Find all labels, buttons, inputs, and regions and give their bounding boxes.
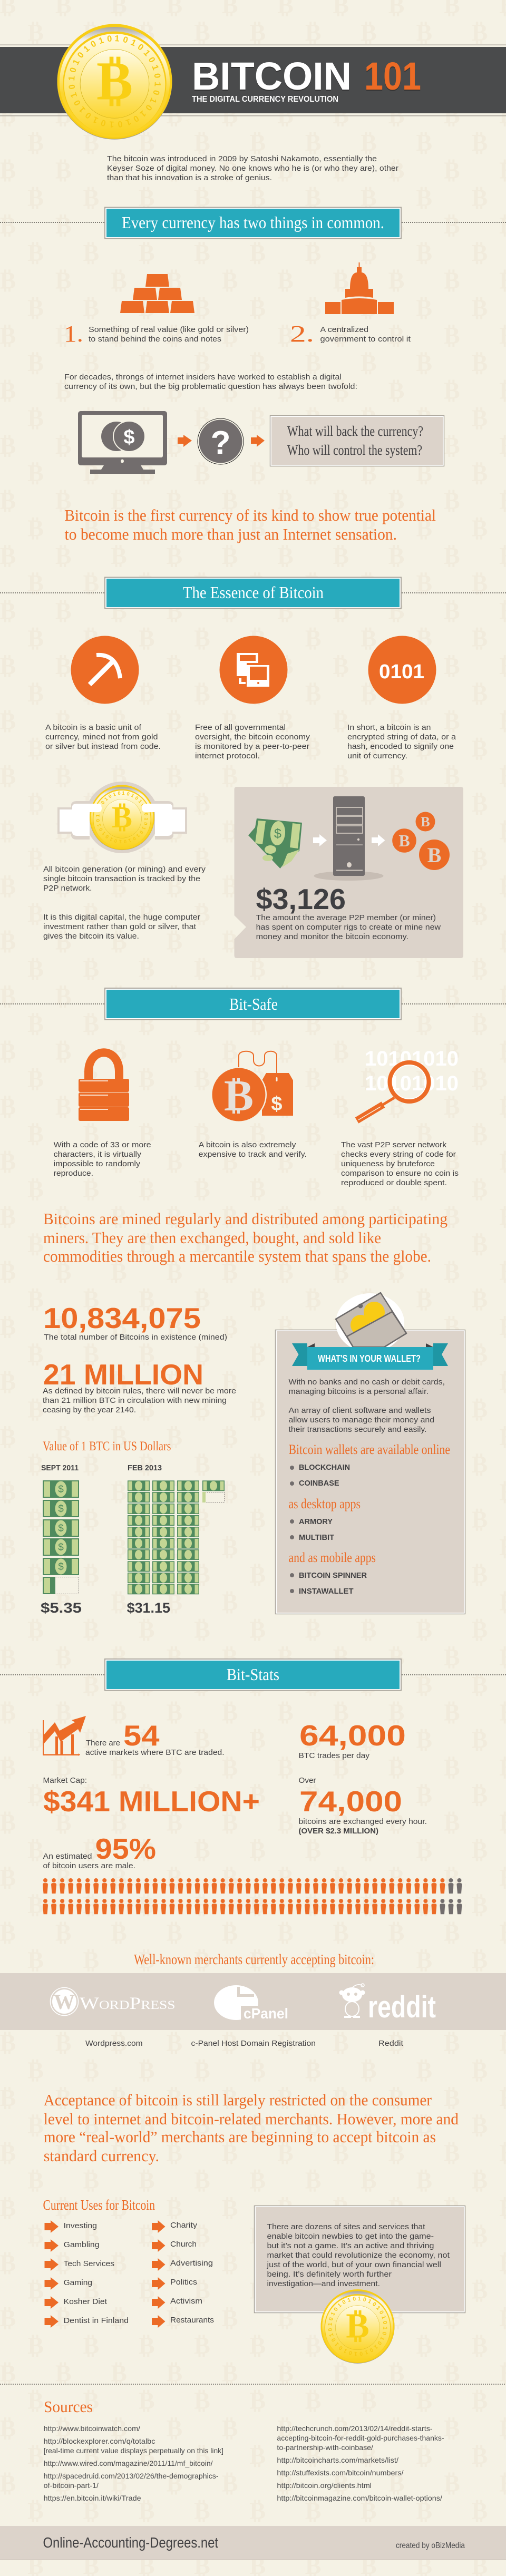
icon: coin with price tag: $ — [271, 1093, 283, 1115]
text: code of 33: impossible to randomly — [54, 1159, 141, 1168]
source list left: http://spacedruid.com/2013/02/26/the-demographics- — [44, 2472, 219, 2480]
ribbon — [292, 1343, 448, 1370]
stat: 64,000: BTC trades per day — [298, 1751, 370, 1760]
wallet list: INSTAWALLET — [299, 1587, 353, 1596]
list: uses column 1: Investing — [64, 2221, 97, 2230]
chart: Sept 2011 bills: $ — [58, 1504, 64, 1515]
header band — [0, 44, 506, 116]
icon: 0101 circle — [368, 636, 436, 704]
stat: 21 million: ceasing by the year 2140. — [43, 1406, 136, 1414]
text: server network: reproduced or double spent. — [341, 1178, 447, 1187]
statement: acceptance: level to internet and bitcoin-related merchants. However, more and — [44, 2110, 459, 2128]
text: track and verify — [199, 1140, 307, 1159]
panel: closing note: investigation—and investment. — [267, 2279, 380, 2288]
numbered point 1: to stand behind the coins and notes — [89, 335, 221, 344]
panel: what's in your wallet — [275, 1293, 465, 1614]
icon: large bitcoin coin — [57, 24, 172, 140]
icon: orange coins: B — [427, 843, 441, 867]
source list left: https://en.bitcoin.it/wiki/Trade — [44, 2494, 141, 2502]
list: uses column 1 — [44, 2220, 129, 2328]
stat: 64,000: 64,000 — [299, 1719, 406, 1752]
logo: WordPress — [51, 1988, 175, 2015]
icon: large bitcoin coin: B — [96, 51, 133, 111]
text: P2P tracking: All bitcoin generation (or mining) and every — [43, 865, 206, 874]
icon: coin with price tag — [212, 1051, 293, 1122]
stat: 74,000 — [298, 1776, 427, 1836]
wallet list: as desktop apps — [289, 1496, 361, 1511]
panel: closing note: but it’s not a game. It’s an active and thriving — [267, 2241, 434, 2250]
text: P2P tracking: P2P network. — [43, 884, 92, 893]
icon: capitol building — [325, 262, 394, 314]
stat: 64,000 — [298, 1719, 406, 1760]
intro text: than that his innovation is a stroke of genius. — [107, 173, 272, 182]
wallet list: and as mobile apps — [289, 1550, 376, 1565]
numbered point 2: A centralized — [320, 325, 368, 334]
arrow — [251, 435, 265, 447]
text: server network: comparison to ensure no coin is — [341, 1169, 459, 1178]
stat: 21 million: As defined by bitcoin rules, there will never be more — [43, 1387, 236, 1396]
text: server network: checks every string of code for — [341, 1150, 456, 1159]
icon: small bitcoin coin: 10101010101010101010101010101010 — [328, 2297, 387, 2356]
icon: hands holding coin: 10101010101010101010101010101010 — [96, 792, 148, 843]
icon: devices circle — [219, 636, 288, 704]
chart: Sept 2011 bills: SEPT 2011 — [41, 1463, 79, 1472]
text: code of 33 — [54, 1140, 151, 1178]
footer band: Online-Accounting-Degrees.net — [43, 2534, 218, 2551]
icon: server — [314, 796, 384, 881]
source list left: [real-time current value displays perpetually on this link] — [44, 2446, 223, 2455]
heading: sources: Sources — [44, 2397, 93, 2416]
stat: 54 markets — [85, 1719, 225, 1757]
source list right: accepting-bitcoin-for-reddit-gold-purchases-thanks- — [277, 2434, 444, 2442]
icon: wallet — [336, 1293, 406, 1352]
icon: rising chart — [43, 1716, 86, 1756]
source list right — [277, 2424, 444, 2502]
text: server network: The vast P2P server network — [341, 1140, 447, 1149]
text: encrypted string: In short, a bitcoin is an — [347, 723, 431, 732]
text: code of 33: characters, it is virtually — [54, 1150, 142, 1159]
chart: Sept 2011 bills: $5.35 — [41, 1600, 82, 1616]
list: uses column 2: Advertising — [170, 2259, 213, 2268]
icon: small bitcoin coin: B — [346, 2307, 369, 2346]
wallet list — [289, 1442, 450, 1596]
intro text: Keyser Soze of digital money. No one knows who he is (or who they are), other — [107, 164, 398, 173]
text: code of 33: reproduce. — [54, 1169, 93, 1178]
merchant labels: c-Panel Host Domain Registration — [191, 2040, 316, 2048]
chart: Sept 2011 bills: $ — [58, 1542, 64, 1553]
icon: hands holding coin — [57, 782, 187, 853]
chart: Feb 2013 bills — [127, 1463, 225, 1616]
list: uses column 1: Gaming — [64, 2278, 92, 2287]
stat: 21 million: than 21 million BTC in circulation with new mining — [43, 1396, 227, 1405]
logo: WordPress: W — [54, 1990, 75, 2014]
source list right: http://techcrunch.com/2013/02/14/reddit-starts- — [277, 2424, 433, 2433]
arrow — [178, 435, 192, 447]
source list left: of-bitcoin-part-1/ — [44, 2481, 99, 2490]
text: server network: uniqueness by bruteforce — [341, 1159, 435, 1168]
text: P2P tracking: investment rather than gold or silver, that — [43, 922, 197, 931]
icon: question mark: ? — [211, 425, 230, 461]
statement: mined regularly: miners. They are then exchanged, bought, and sold like — [43, 1228, 381, 1247]
text: code of 33: With a code of 33 or more — [54, 1140, 151, 1149]
pictogram: people rows — [43, 1878, 465, 1915]
wallet list: Bitcoin wallets are available online — [289, 1442, 450, 1457]
title — [192, 54, 421, 98]
stat: 21 million — [43, 1358, 236, 1414]
icon: magnifying glass over binary: 10101010 — [365, 1047, 459, 1070]
title: 101 — [364, 54, 421, 98]
stat: total bitcoins: 10,834,075 — [43, 1302, 201, 1334]
text: basic unit: A bitcoin is a basic unit of — [45, 723, 142, 732]
source list right: to-partnership-with-coinbase/ — [277, 2443, 373, 2452]
numbered point 1 — [64, 321, 249, 347]
merchant labels: Reddit — [378, 2040, 403, 2048]
list: uses column 2 — [152, 2220, 214, 2328]
source list left: http://www.bitcoinwatch.com/ — [44, 2424, 140, 2433]
heading: merchants: Well-known merchants currently accepting bitcoin: — [134, 1951, 374, 1967]
intro text: The bitcoin was introduced in 2009 by Satoshi Nakamoto, essentially the — [107, 154, 377, 163]
section banner: every currency — [0, 208, 506, 238]
icon: orange coins: B — [421, 814, 430, 830]
stat description: has spent on computer rigs to create or mine new — [256, 923, 441, 932]
stat: 54 markets: There are — [86, 1739, 120, 1748]
panel: closing note — [254, 2206, 465, 2312]
stat: market cap: Market Cap: — [43, 1776, 87, 1785]
wallet list: ARMORY — [299, 1517, 333, 1526]
icon: monitor with coins — [78, 411, 167, 474]
stat description — [256, 913, 441, 941]
stat: 74,000: 74,000 — [299, 1785, 402, 1818]
statement: mined regularly — [43, 1209, 447, 1265]
logo: cPanel: cPanel — [244, 2005, 288, 2022]
stat: 95% male: of bitcoin users are male. — [43, 1861, 135, 1870]
text: basic unit — [45, 723, 161, 751]
section banner: bit-stats: Bit-Stats — [227, 1665, 279, 1684]
paragraph: for decades: For decades, throngs of internet insiders have worked to establish a digital — [64, 373, 342, 382]
statement: first currency: Bitcoin is the first currency of its kind to show true potential — [64, 506, 436, 524]
wallet list: BITCOIN SPINNER — [299, 1571, 367, 1580]
numbered point 2: government to control it — [320, 335, 411, 344]
arrow — [313, 834, 327, 846]
stat: market cap: $341 MILLION+ — [43, 1785, 260, 1818]
text: encrypted string — [347, 723, 456, 760]
stat: 74,000: bitcoins are exchanged every hour. — [298, 1817, 427, 1826]
section banner: bit-safe — [0, 988, 506, 1020]
text: encrypted string: hash, encoded to signify one — [347, 742, 454, 751]
list: uses column 1: Tech Services — [64, 2259, 114, 2268]
subtitle: THE DIGITAL CURRENCY REVOLUTION — [192, 95, 338, 104]
text: free of oversight: is monitored by a peer-to-peer — [195, 742, 309, 751]
panel text: With no banks and no cash or debit cards, — [289, 1378, 445, 1387]
merchants band — [0, 1973, 506, 2030]
text: P2P tracking — [43, 865, 206, 941]
chart: Sept 2011 bills: $ — [58, 1523, 64, 1534]
icon: money stack: $ — [274, 826, 281, 841]
icon: hands holding coin: B — [112, 800, 132, 834]
intro text — [107, 154, 398, 182]
stat: 54 markets: 54 — [123, 1719, 160, 1752]
question box — [270, 415, 444, 466]
footer band: created by oBizMedia — [396, 2541, 465, 2550]
stat description: money and monitor the bitcoin economy. — [256, 932, 408, 941]
icon: small bitcoin coin — [320, 2289, 394, 2364]
panel text: their transactions securely and easily. — [289, 1425, 427, 1434]
panel: closing note: There are dozens of sites and services that — [267, 2222, 425, 2231]
section banner: bit-safe: Bit-Safe — [229, 994, 278, 1013]
stat: 74,000: Over — [298, 1776, 316, 1785]
icon: pickaxe circle — [71, 636, 139, 704]
icon: orange coins: B — [398, 831, 410, 850]
icon: magnifying glass over binary: 10101010 — [365, 1072, 459, 1095]
numbered point 2 — [290, 321, 411, 347]
chart: Sept 2011 bills — [41, 1463, 82, 1616]
source list left: http://www.wired.com/magazine/2011/11/mf_bitcoin/ — [44, 2459, 213, 2467]
stat: total bitcoins — [43, 1302, 227, 1342]
section banner: essence: The Essence of Bitcoin — [183, 583, 324, 602]
statement: acceptance — [44, 2091, 459, 2165]
numbered point 1: Something of real value (like gold or silver) — [89, 325, 249, 334]
chart: Sept 2011 bills: $ — [58, 1484, 64, 1495]
statement: acceptance: more “real-world” merchants are beginning to accept bitcoin as — [44, 2128, 436, 2146]
question box: What will back the currency? — [287, 423, 423, 439]
statement: acceptance: standard currency. — [44, 2146, 159, 2165]
icon: coin with price tag: B — [224, 1071, 254, 1120]
icon: orange coins — [392, 812, 450, 870]
chart: Feb 2013 bills: FEB 2013 — [128, 1463, 162, 1472]
section banner: essence — [0, 578, 506, 608]
text: free of oversight: Free of all governmental — [195, 723, 286, 732]
question box: Who will control the system? — [287, 442, 422, 458]
source list left — [44, 2424, 223, 2502]
icon: padlock — [79, 1052, 129, 1121]
text: P2P tracking: single bitcoin transaction is tracked by the — [43, 874, 200, 883]
icon: 0101 circle: 0101 — [379, 661, 424, 683]
statement: first currency: to become much more than just an Internet sensation. — [64, 525, 397, 543]
list: uses column 1: Dentist in Finland — [64, 2316, 129, 2325]
icon: money stack — [248, 818, 302, 869]
icon: monitor with coins: $ — [123, 426, 135, 448]
panel: closing note: market that could revolutionize the economy, not — [267, 2251, 450, 2260]
logo: reddit: reddit — [368, 1990, 436, 2024]
logo: WordPress: WordPress — [80, 1994, 175, 2013]
text: free of oversight: internet protocol. — [195, 752, 260, 760]
logo: reddit — [339, 1984, 436, 2024]
text: free of oversight: oversight, the bitcoin economy — [195, 733, 310, 741]
text: P2P tracking: It is this digital capital, the huge computer — [43, 913, 200, 922]
wallet list: BLOCKCHAIN — [299, 1463, 350, 1472]
list: uses column 1: Kosher Diet — [64, 2297, 108, 2306]
wallet list: MULTIBIT — [299, 1533, 334, 1542]
panel: closing note: just of the world, but of your own financial well — [266, 2260, 441, 2269]
numbered point 2: 2. — [290, 321, 314, 347]
panel: closing note: enable bitcoin newbies to get into the game- — [267, 2232, 434, 2241]
statement: mined regularly: commodities through a mercantile system that spans the globe. — [43, 1247, 431, 1265]
icon: gold bars — [120, 274, 194, 313]
panel text: managing bitcoins is a personal affair. — [289, 1387, 429, 1396]
text: track and verify: expensive to track and verify. — [199, 1150, 307, 1159]
list: uses column 2: Charity — [170, 2221, 198, 2230]
statement: first currency — [64, 506, 436, 543]
text: basic unit: currency, mined not from gold — [45, 733, 158, 741]
numbered point 1: 1. — [64, 321, 83, 347]
logo: cPanel — [214, 1985, 288, 2022]
source list left: http://blockexplorer.com/q/totalbc — [44, 2437, 155, 2445]
stat: 74,000: (OVER $2.3 MILLION) — [298, 1827, 378, 1836]
text: encrypted string: unit of currency. — [347, 752, 407, 760]
icon: large bitcoin coin: 10101010101010101010101010101010 — [69, 35, 161, 128]
panel: mining cost — [234, 787, 463, 958]
paragraph: for decades: currency of its own, but the big problematic question has always been twofold: — [64, 382, 357, 391]
merchant labels: Wordpress.com — [85, 2040, 143, 2048]
list: uses column 1: Gambling — [64, 2240, 100, 2249]
stat: total bitcoins: The total number of Bitcoins in existence (mined) — [44, 1333, 227, 1342]
chart: Feb 2013 bills: $31.15 — [127, 1600, 170, 1616]
list: uses column 2: Activism — [170, 2297, 202, 2306]
merchant labels — [85, 2040, 403, 2048]
text: server network — [341, 1140, 459, 1187]
stat: 54 markets: active markets where BTC are traded. — [85, 1748, 225, 1757]
panel text: An array of client software and wallets — [289, 1406, 431, 1415]
text: encrypted string: encrypted string of data, or a — [347, 733, 456, 741]
text: basic unit: or silver but instead from code. — [45, 742, 161, 751]
stat: 95% male: An estimated — [43, 1852, 92, 1861]
panel text — [289, 1378, 445, 1434]
stat: 95% male: 95% — [95, 1832, 156, 1865]
stat: 95% male — [43, 1832, 156, 1870]
statement: mined regularly: Bitcoins are mined regularly and distributed among participating — [43, 1209, 447, 1228]
paragraph: for decades — [64, 373, 357, 391]
source list right: http://bitcoinmagazine.com/bitcoin-wallet-options/ — [277, 2494, 442, 2502]
chart heading: value of 1 BTC: Value of 1 BTC in US Dollars — [43, 1439, 171, 1453]
list: uses column 2: Restaurants — [170, 2316, 214, 2325]
section banner: every currency: Every currency has two things in common. — [122, 213, 384, 232]
panel text: allow users to manage their money and — [289, 1416, 434, 1424]
chart: Sept 2011 bills: $ — [58, 1562, 64, 1573]
heading: current uses: Current Uses for Bitcoin — [43, 2197, 155, 2213]
text: free of oversight — [195, 723, 310, 760]
statement: acceptance: Acceptance of bitcoin is still largely restricted on the consumer — [44, 2091, 432, 2109]
source list right: http://bitcoincharts.com/markets/list/ — [277, 2456, 398, 2464]
text: P2P tracking: gives the bitcoin its value. — [43, 932, 139, 941]
icon: magnifying glass over binary — [357, 1047, 459, 1120]
list: uses column 2: Church — [170, 2240, 197, 2249]
footer band — [0, 2526, 506, 2560]
source list right: http://stuffexists.com/bitcoin/numbers/ — [277, 2468, 404, 2477]
arrow — [372, 834, 385, 846]
panel: closing note: being. It’s definitely worth further — [267, 2270, 392, 2279]
title: BITCOIN — [192, 54, 352, 98]
stat: $3,126: $3,126 — [256, 883, 346, 915]
ribbon: WHAT'S IN YOUR WALLET? — [318, 1353, 421, 1364]
source list right: http://bitcoin.org/clients.html — [277, 2481, 372, 2490]
text: track and verify: A bitcoin is also extremely — [199, 1140, 296, 1149]
icon: question mark — [198, 418, 244, 464]
stat description: The amount the average P2P member (or miner) — [256, 913, 436, 922]
section banner: bit-stats — [0, 1659, 506, 1691]
list: uses column 2: Politics — [170, 2278, 197, 2287]
wallet list: COINBASE — [299, 1479, 339, 1488]
stat: 21 million: 21 MILLION — [43, 1358, 203, 1391]
